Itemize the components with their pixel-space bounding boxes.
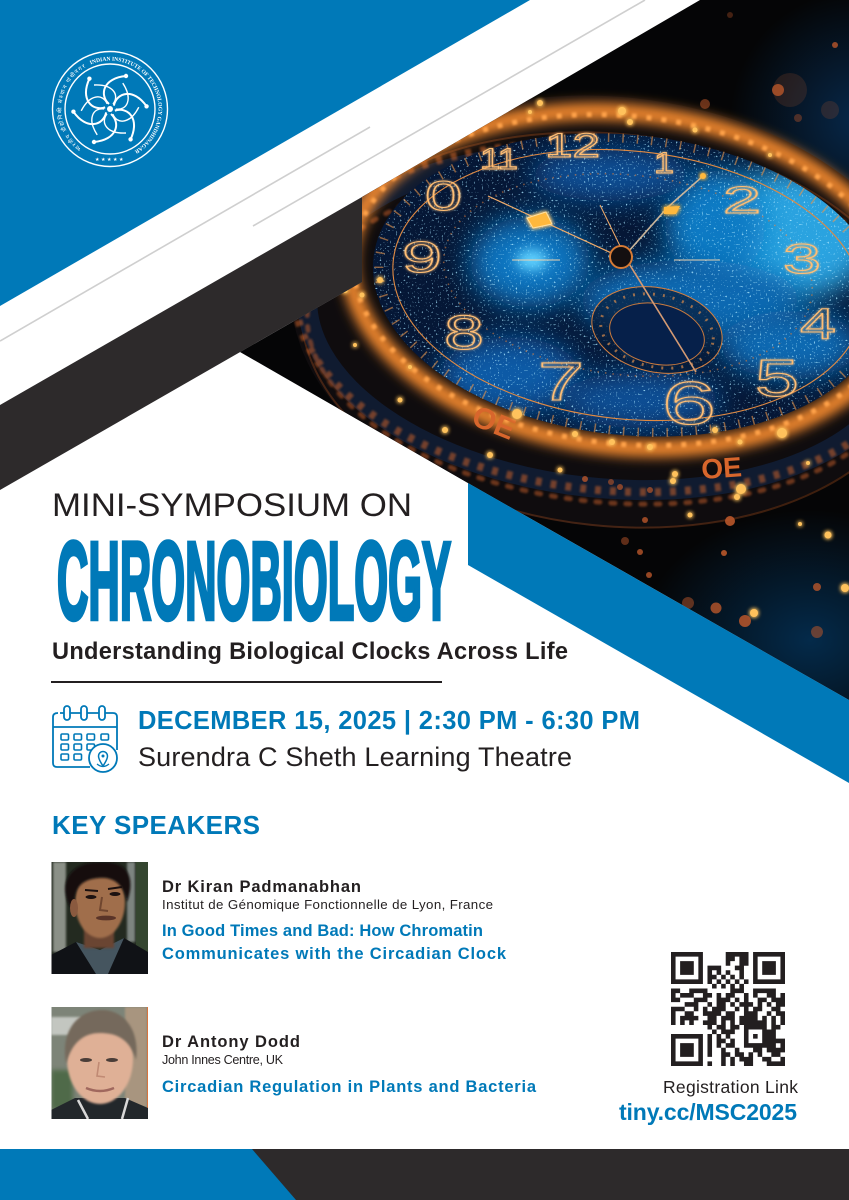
divider rule bbox=[51, 681, 442, 683]
subtitle: Understanding Biological Clocks Across Life bbox=[52, 639, 568, 665]
heading: mini-symposium on: MINI-SYMPOSIUM ON bbox=[52, 487, 412, 523]
clock numerals: 11 bbox=[480, 143, 518, 176]
speaker 1 details bbox=[162, 878, 507, 963]
logo stars: ★★★★★ bbox=[95, 157, 125, 163]
clock numerals: 5 bbox=[755, 350, 799, 408]
clock numerals: 1 bbox=[654, 147, 674, 180]
clock numerals: 9 bbox=[402, 233, 442, 282]
bokeh lights bbox=[582, 12, 839, 638]
blue diagonal accent beneath photo bbox=[468, 483, 849, 783]
speaker 2 portrait bbox=[51, 1007, 149, 1119]
speaker 1 portrait bbox=[51, 862, 149, 974]
clock hands bbox=[488, 176, 720, 372]
clock numerals: 7 bbox=[538, 352, 584, 412]
clock numerals: 12 bbox=[545, 127, 600, 165]
top blue diagonal band bbox=[0, 0, 530, 306]
speaker 1 talk title: Communicates with the Circadian Clock bbox=[162, 945, 507, 963]
orange engraved glyphs on rim bbox=[474, 408, 742, 478]
clock face bbox=[373, 134, 849, 436]
orange engraved glyphs on rim: OE bbox=[700, 451, 743, 485]
speaker 2 affiliation: John Innes Centre, UK bbox=[162, 1053, 284, 1067]
sub dial bbox=[591, 286, 723, 374]
photo: glowing cosmic clock bbox=[240, 0, 849, 700]
clock numerals: 4 bbox=[800, 300, 836, 349]
speaker 2 name: Dr Antony Dodd bbox=[162, 1033, 300, 1051]
heading: key speakers: KEY SPEAKERS bbox=[52, 810, 260, 840]
speaker 1 talk title: In Good Times and Bad: How Chromatin bbox=[162, 922, 483, 940]
icon: calendar with location pin bbox=[53, 706, 117, 772]
QR code bbox=[671, 954, 785, 1064]
grey accent lines bbox=[0, 0, 645, 341]
speaker 2 talk title: Circadian Regulation in Plants and Bacteria bbox=[162, 1078, 537, 1096]
event date and time: DECEMBER 15, 2025 | 2:30 PM - 6:30 PM bbox=[138, 707, 640, 735]
clock numerals: 0 bbox=[425, 172, 462, 219]
clock numerals bbox=[402, 127, 836, 437]
clock numerals: 6 bbox=[662, 370, 716, 437]
speaker 2 details bbox=[162, 1033, 537, 1096]
glowing beads bbox=[342, 100, 849, 617]
footer dark bar bbox=[0, 1149, 849, 1200]
speaker 1 affiliation: Institut de Génomique Fonctionnelle de Lyon, France bbox=[162, 897, 493, 912]
clock numerals: 8 bbox=[444, 307, 484, 360]
clock numerals: 2 bbox=[723, 180, 761, 222]
dark diagonal band bbox=[0, 197, 362, 490]
clock body bbox=[294, 96, 849, 526]
event venue: Surendra C Sheth Learning Theatre bbox=[138, 742, 572, 772]
logo circular text: INDIAN INSTITUTE OF TECHNOLOGY GANDHINAGAR bbox=[89, 56, 162, 154]
logo: IIT Gandhinagar bbox=[52, 50, 168, 168]
clock dial rings bbox=[392, 148, 849, 422]
footer blue wedge bbox=[0, 1149, 296, 1200]
clock numerals: 3 bbox=[783, 235, 821, 282]
orange engraved glyphs on rim: OE bbox=[467, 400, 520, 447]
registration link: tiny.cc/MSC2025 bbox=[619, 1099, 797, 1125]
speaker 1 name: Dr Kiran Padmanabhan bbox=[162, 878, 361, 896]
logo circular Hindi text: भारतीय प्रौद्योगिकी संस्थान गांधीनगर bbox=[56, 64, 86, 151]
registration label: Registration Link bbox=[663, 1077, 798, 1097]
logo flower bbox=[70, 74, 150, 144]
